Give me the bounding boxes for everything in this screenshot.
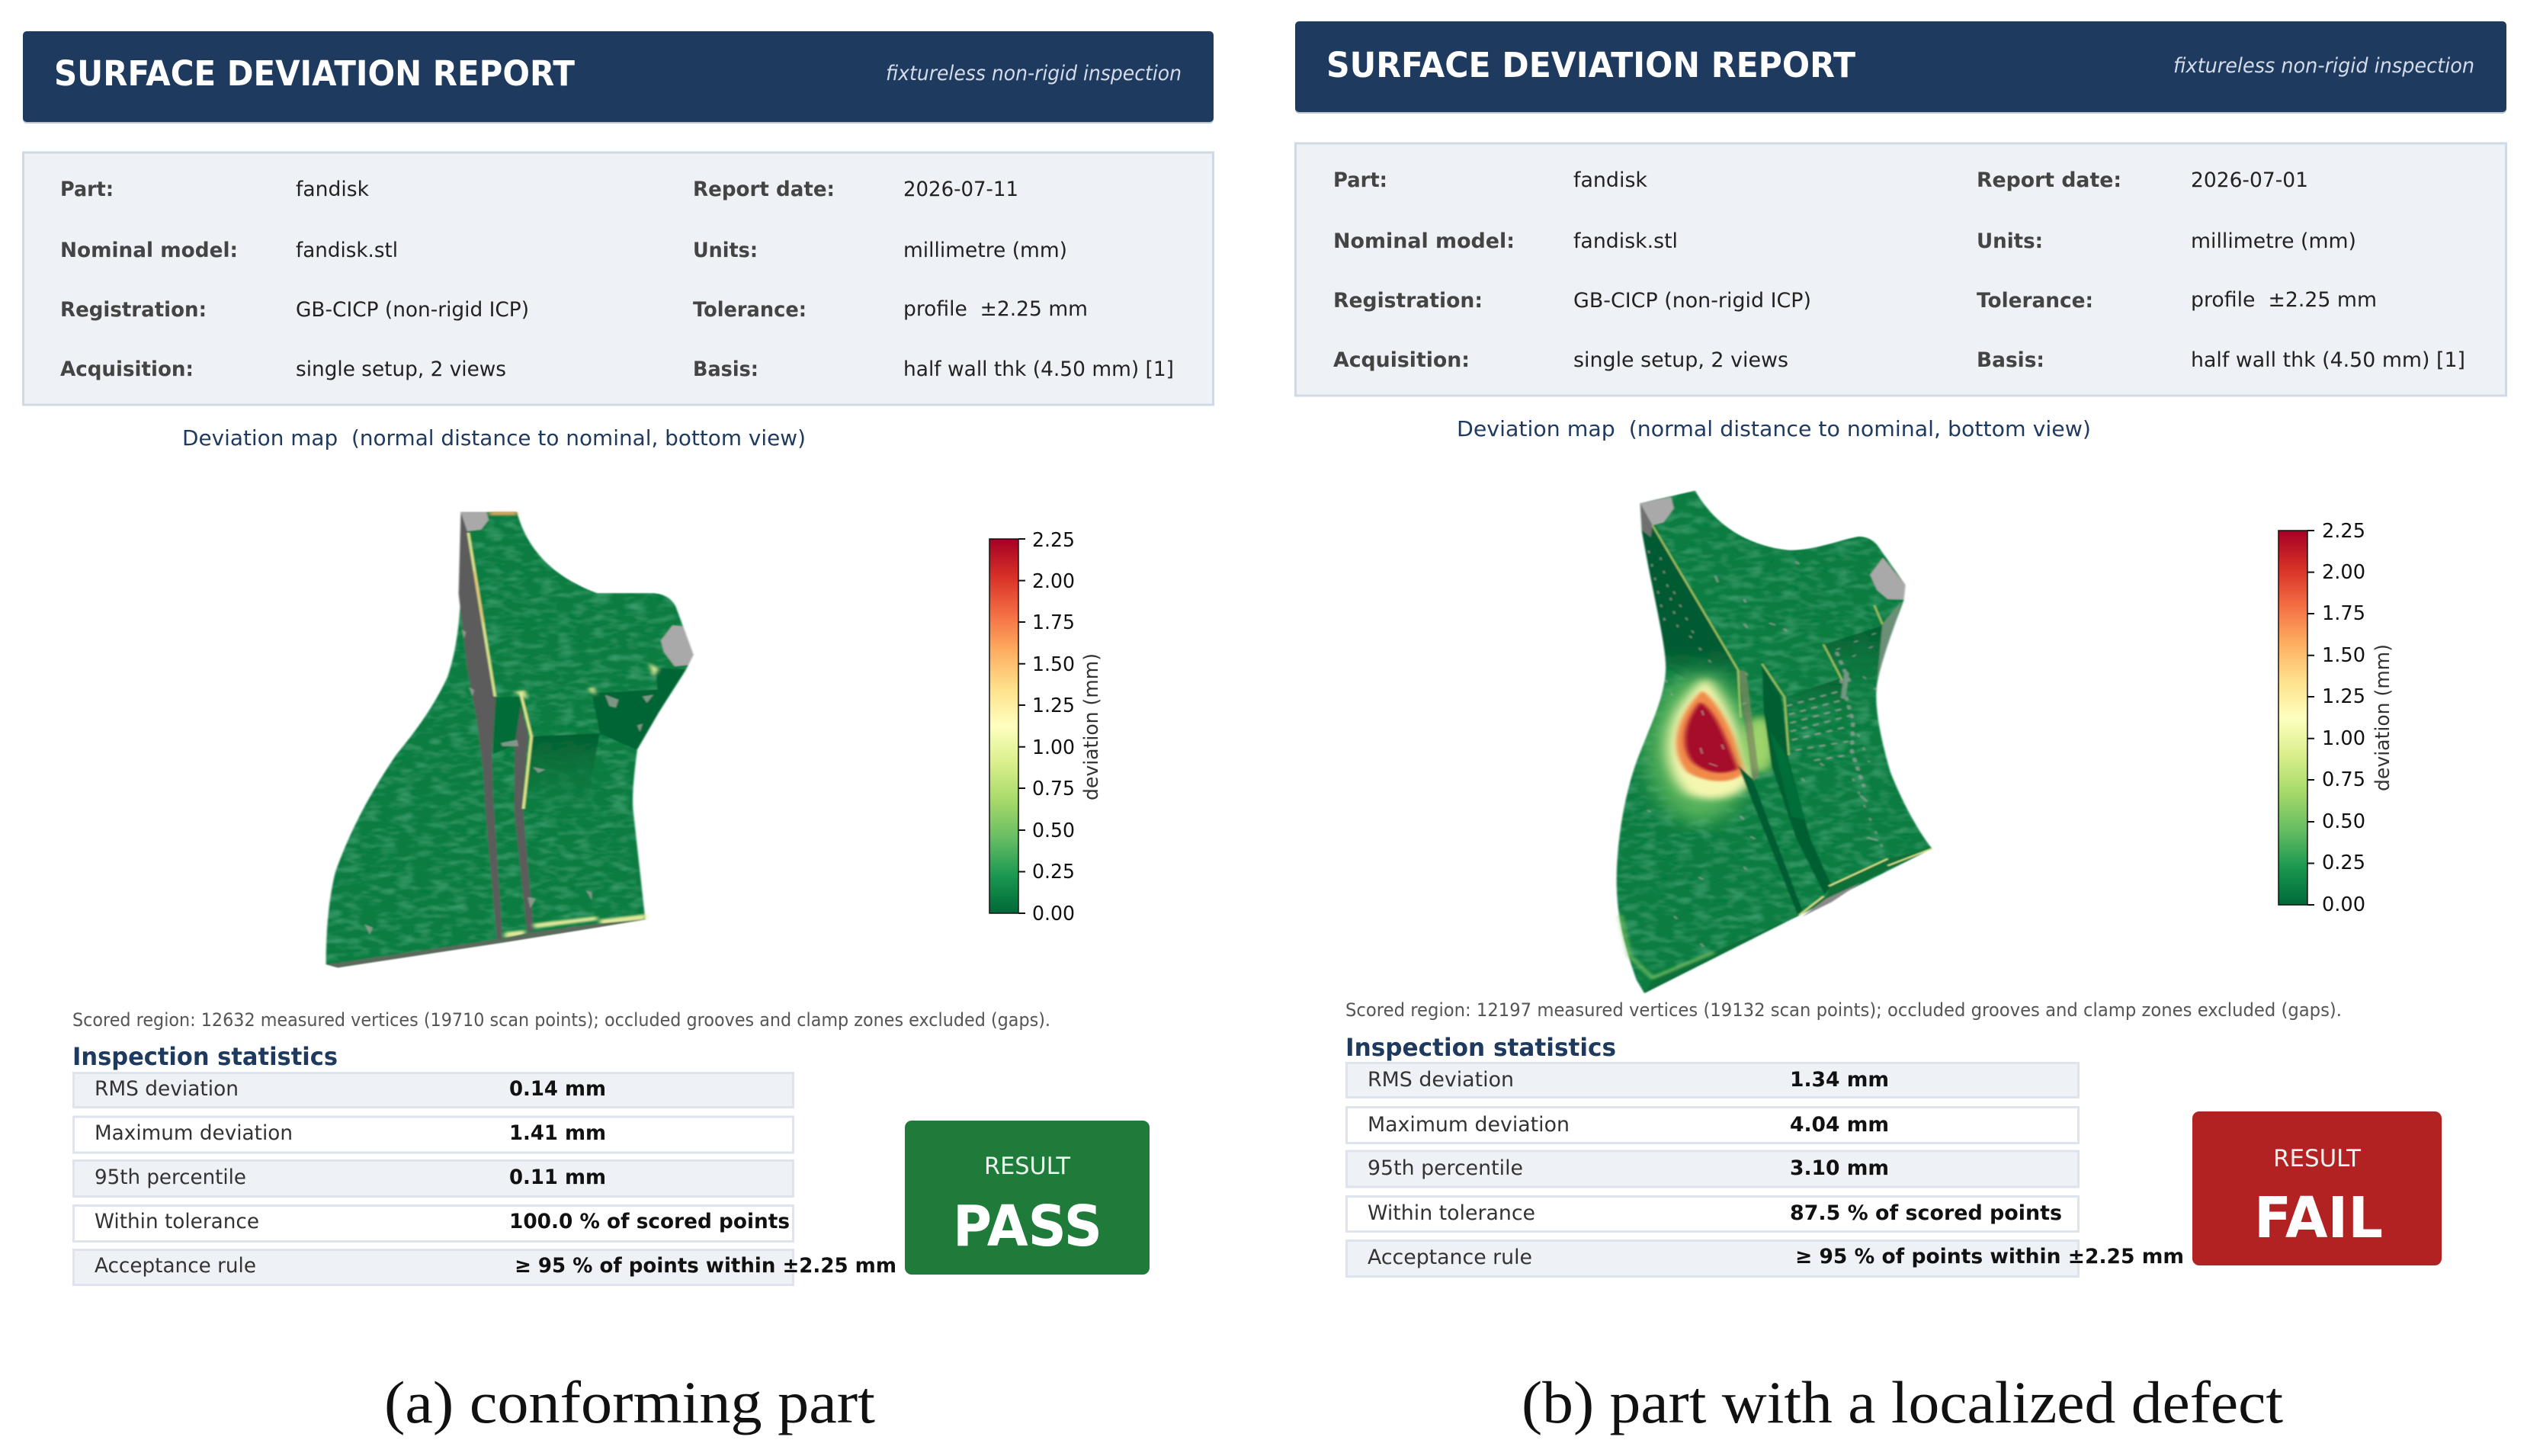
metadata panel: half wall thk (4.50 mm) [1] <box>2191 348 2465 372</box>
colorbar: conforming part: 0.75 <box>1032 778 1075 800</box>
icon: defect hot spot <box>1647 673 1754 823</box>
result badge: pass <box>905 1121 1150 1275</box>
inspection statistics table: 0.11 mm <box>509 1166 606 1189</box>
result badge: fail <box>2192 1111 2442 1265</box>
metadata panel: Report date: <box>693 178 835 201</box>
result badge: fail: FAIL <box>2254 1185 2383 1251</box>
colorbar: defective part: 0.75 <box>2322 768 2365 791</box>
panel: defective part report <box>1295 21 2506 1435</box>
colorbar: defective part <box>2278 520 2394 916</box>
deviation map heading: Deviation map (normal distance to nominal, bottom view) <box>1457 416 2091 441</box>
deviation map: defective mesh <box>1617 491 1932 993</box>
caption (b): (b) part with a localized defect <box>1522 1369 2283 1435</box>
metadata panel: Units: <box>1977 229 2043 253</box>
metadata panel: Acquisition: <box>60 358 194 381</box>
metadata panel <box>23 152 1214 405</box>
inspection statistics table: 95th percentile <box>1368 1156 1523 1180</box>
inspection statistics table: Maximum deviation <box>1368 1113 1570 1137</box>
metadata panel: fandisk.stl <box>296 239 398 262</box>
metadata panel <box>1296 143 2506 396</box>
metadata panel: profile ±2.25 mm <box>903 297 1088 321</box>
metadata panel: Nominal model: <box>60 239 238 262</box>
metadata panel: Part: <box>60 178 114 201</box>
inspection statistics heading: Inspection statistics <box>72 1042 338 1071</box>
metadata panel: Basis: <box>1977 348 2044 372</box>
metadata panel: 2026-07-01 <box>2191 168 2308 192</box>
result badge: pass: PASS <box>953 1194 1102 1259</box>
inspection statistics table: 100.0 % of scored points <box>509 1210 790 1233</box>
metadata panel: Registration: <box>60 298 207 322</box>
metadata panel: fandisk <box>1573 168 1647 192</box>
metadata panel: fandisk.stl <box>1573 229 1678 253</box>
colorbar: conforming part: 1.00 <box>1032 736 1075 759</box>
inspection statistics table: 87.5 % of scored points <box>1790 1201 2062 1225</box>
colorbar: defective part: 1.00 <box>2322 727 2365 750</box>
inspection statistics table: 1.41 mm <box>509 1121 606 1145</box>
inspection statistics table: 1.34 mm <box>1790 1068 1889 1092</box>
report title: SURFACE DEVIATION REPORT <box>54 53 575 94</box>
scored region note: Scored region: 12632 measured vertices (19710 scan points); occluded grooves and clamp zones excluded (gaps). <box>72 1009 1050 1031</box>
metadata panel: single setup, 2 views <box>1573 348 1788 372</box>
metadata panel: profile ±2.25 mm <box>2191 288 2377 312</box>
colorbar: conforming part: 1.25 <box>1032 694 1075 717</box>
header banner <box>23 31 1214 123</box>
metadata panel: Registration: <box>1333 289 1483 313</box>
result badge: fail: RESULT <box>2273 1145 2362 1172</box>
report subtitle: fixtureless non-rigid inspection <box>2173 54 2474 78</box>
inspection statistics table: RMS deviation <box>1368 1068 1514 1092</box>
colorbar: defective part: 1.25 <box>2322 685 2365 708</box>
metadata panel: Tolerance: <box>693 298 807 322</box>
colorbar: defective part: 2.25 <box>2322 520 2365 543</box>
metadata panel: millimetre (mm) <box>903 239 1067 262</box>
colorbar: conforming part: 1.50 <box>1032 653 1075 676</box>
inspection statistics table: ≥ 95 % of points within ±2.25 mm <box>1795 1245 2184 1268</box>
metadata panel: Part: <box>1333 168 1387 192</box>
metadata panel: GB-CICP (non-rigid ICP) <box>296 298 529 322</box>
colorbar: defective part: 1.75 <box>2322 602 2365 625</box>
colorbar: conforming part: 0.50 <box>1032 819 1075 842</box>
inspection statistics table: Acceptance rule <box>1368 1246 1532 1269</box>
inspection statistics table: 95th percentile <box>95 1166 246 1189</box>
deviation map: conforming mesh <box>326 512 694 967</box>
inspection statistics table: Acceptance rule <box>95 1254 256 1278</box>
colorbar axis title: deviation (mm) <box>1080 653 1103 800</box>
colorbar: conforming part: 0.00 <box>1032 903 1075 925</box>
colorbar: conforming part <box>989 529 1103 925</box>
inspection statistics table: Within tolerance <box>95 1210 259 1233</box>
report title: SURFACE DEVIATION REPORT <box>1326 45 1855 85</box>
metadata panel: Basis: <box>693 358 758 381</box>
colorbar: defective part: 2.00 <box>2322 561 2365 584</box>
colorbar: conforming part: 2.00 <box>1032 570 1075 593</box>
inspection statistics heading: Inspection statistics <box>1345 1033 1616 1062</box>
colorbar: defective part: 0.50 <box>2322 810 2365 833</box>
metadata panel: millimetre (mm) <box>2191 229 2356 253</box>
inspection statistics table: ≥ 95 % of points within ±2.25 mm <box>515 1254 896 1278</box>
inspection statistics table: Maximum deviation <box>95 1121 293 1145</box>
colorbar: conforming part: 2.25 <box>1032 529 1075 552</box>
inspection statistics table <box>73 1073 896 1285</box>
header banner <box>1295 21 2506 114</box>
colorbar: defective part: 0.25 <box>2322 851 2365 874</box>
inspection statistics table: Within tolerance <box>1368 1201 1535 1225</box>
metadata panel: Tolerance: <box>1977 289 2093 313</box>
metadata panel: fandisk <box>296 178 369 201</box>
scored region note: Scored region: 12197 measured vertices (19132 scan points); occluded grooves and clamp zones excluded (gaps). <box>1345 999 2342 1021</box>
caption (a): (a) conforming part <box>384 1369 875 1435</box>
gray dropout dots <box>1648 551 1885 946</box>
colorbar axis title: deviation (mm) <box>2371 644 2394 791</box>
deviation map heading: Deviation map (normal distance to nominal, bottom view) <box>182 425 806 451</box>
metadata panel: single setup, 2 views <box>296 358 506 381</box>
inspection statistics table: 3.10 mm <box>1790 1156 1889 1180</box>
metadata panel: Acquisition: <box>1333 348 1470 372</box>
panel: conforming part report <box>23 31 1214 1435</box>
metadata panel: half wall thk (4.50 mm) [1] <box>903 358 1174 381</box>
colorbar: defective part: 1.50 <box>2322 644 2365 667</box>
metadata panel: 2026-07-11 <box>903 178 1018 201</box>
colorbar: conforming part: 1.75 <box>1032 611 1075 634</box>
report subtitle: fixtureless non-rigid inspection <box>886 62 1182 85</box>
inspection statistics table: 0.14 mm <box>509 1077 606 1101</box>
metadata panel: Units: <box>693 239 758 262</box>
colorbar: defective part: 0.00 <box>2322 893 2365 916</box>
colorbar: conforming part: 0.25 <box>1032 861 1075 884</box>
metadata panel: Report date: <box>1977 168 2121 192</box>
inspection statistics table: 4.04 mm <box>1790 1113 1889 1137</box>
inspection statistics table: RMS deviation <box>95 1077 239 1101</box>
result badge: pass: RESULT <box>984 1153 1071 1180</box>
metadata panel: Nominal model: <box>1333 229 1515 253</box>
inspection statistics table <box>1346 1063 2184 1276</box>
metadata panel: GB-CICP (non-rigid ICP) <box>1573 289 1811 313</box>
